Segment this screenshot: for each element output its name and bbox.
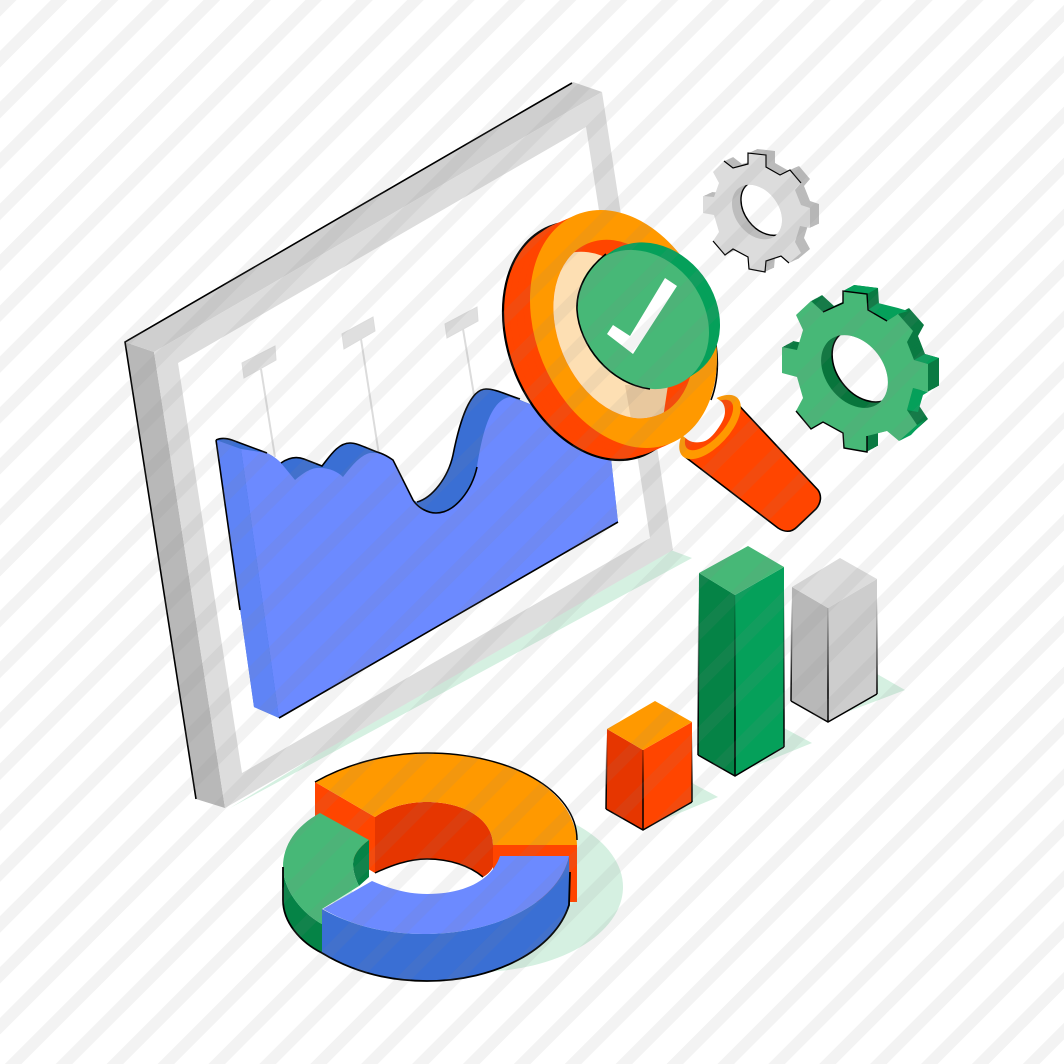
frame top side <box>125 82 602 352</box>
orange bar shadow <box>663 783 718 820</box>
green bar <box>698 546 784 776</box>
floor shadow: donut <box>331 802 623 972</box>
magnifier handle <box>668 384 820 531</box>
label 1 <box>242 346 276 457</box>
area chart left face <box>216 440 279 718</box>
gear outline <box>796 291 887 452</box>
gear face <box>703 153 810 272</box>
green slice inner wall <box>353 840 369 886</box>
blue slice side <box>322 856 570 981</box>
bar chart <box>606 546 905 830</box>
label 3 <box>445 307 478 395</box>
small gray gear <box>703 149 819 272</box>
orange slice top <box>315 753 577 845</box>
orange bar <box>606 701 692 830</box>
donut outline <box>283 867 570 981</box>
blue slice <box>322 856 570 981</box>
area chart back <box>216 389 618 718</box>
area chart front face <box>241 397 618 718</box>
label 2 <box>342 317 379 455</box>
floor shadow: monitor <box>230 546 692 808</box>
gray bar <box>791 558 877 722</box>
gear hole <box>821 335 888 408</box>
chart labels with leader lines <box>242 307 478 457</box>
badge outline <box>577 254 650 389</box>
frame left side <box>125 342 225 808</box>
gear extrusion <box>704 149 819 272</box>
area chart outline <box>216 389 618 718</box>
magnifier <box>502 210 822 532</box>
donut hole <box>343 830 507 914</box>
check badge <box>550 216 747 415</box>
orange slice inner wall <box>375 802 493 877</box>
magnifier lens <box>553 240 690 418</box>
green slice side <box>283 867 322 953</box>
gear hole <box>732 184 782 240</box>
magnifier right edge outline <box>711 345 717 400</box>
monitor frame <box>125 82 673 808</box>
orange slice <box>315 753 577 902</box>
gear face <box>782 291 928 452</box>
badge face <box>550 224 736 415</box>
magnifier rear rim <box>469 184 745 489</box>
donut chart <box>283 753 577 981</box>
magnifier front ring <box>496 181 751 477</box>
orange slice sides <box>315 782 375 873</box>
handle inner red ring <box>677 392 741 458</box>
area chart <box>216 389 618 718</box>
gear outline <box>713 153 801 272</box>
handle opening <box>678 388 725 442</box>
handle orange ring <box>668 384 752 470</box>
frame outline <box>125 83 572 799</box>
gray bar shadow <box>847 674 905 712</box>
frame front face <box>154 92 673 808</box>
gear lit facets <box>843 285 939 441</box>
check mark <box>607 278 677 354</box>
green slice <box>283 813 369 953</box>
large green gear <box>782 285 939 452</box>
green bar shadow <box>753 728 812 767</box>
badge back <box>561 216 747 408</box>
gear extrusion <box>783 285 939 452</box>
green slice top <box>283 813 369 924</box>
blue slice top <box>323 856 569 934</box>
